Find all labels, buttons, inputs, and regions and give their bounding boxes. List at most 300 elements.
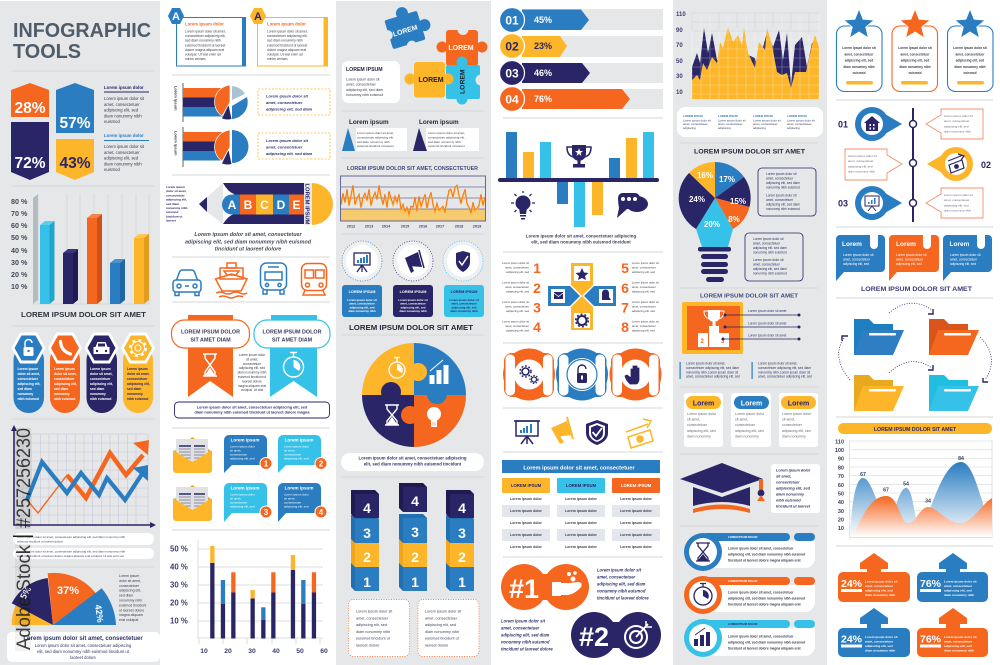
stacked bar chart: 50 [296, 648, 304, 655]
info cards under badges: diam nonummy nibh [450, 309, 478, 313]
notched bubble cards: Lorem ipsum dolor sit [843, 253, 874, 257]
A note box yellow: volutpat. Ut wisi enim ad [267, 52, 303, 56]
speech bubble 2: sit amet, [284, 448, 296, 452]
speech bubble 1: sit amet, [230, 448, 242, 452]
dotted note boxes: amet, consectetuer [356, 616, 389, 620]
text block: hexagon notes: euismod [104, 167, 120, 172]
hexagon pill cards: sed diam [127, 387, 141, 391]
smooth area chart: 10 [838, 526, 844, 532]
bar and pie combo 1 [174, 83, 248, 122]
legend card: area chart [677, 107, 823, 137]
note box: bulb lower: Lorem ipsum dolor sit [753, 237, 784, 241]
dotted note boxes: euismod tincidunt ut [425, 637, 460, 641]
light bulb pie chart [679, 162, 751, 282]
note box: bulb lower: amet, consectetuer [753, 242, 781, 246]
speech bubble 3: 3 [264, 508, 269, 517]
arrow stat card blue 76 [917, 553, 988, 602]
text block: hexagon notes: adipiscing elit, sed [104, 156, 139, 161]
text block: rank 1: nonummy nibh euismod [597, 588, 646, 594]
timeline row: hourglass: LOREM IPSUM DOLOR [728, 535, 757, 539]
text block: ribbon middle: volutpat. Ut wisi [241, 388, 263, 392]
icon: hand [552, 571, 582, 596]
text block: hexagon notes: amet, consectetuer [104, 150, 140, 155]
text block: pencil note: dolor sit amet, [166, 189, 187, 193]
hexagon pill cards: dolor sit amet, [90, 372, 113, 376]
text block: pie notes: magna aliquam [119, 613, 143, 617]
speech bubble 3 [224, 483, 272, 522]
star card 2: Lorem ipsum dolor sit [898, 46, 933, 50]
note box: bulb upper: Lorem ipsum dolor sit [766, 194, 797, 198]
callout: pie summary: laoreet dolore [70, 655, 96, 660]
text block: pie notes: dolor sit amet, [119, 579, 141, 583]
speech bubble 2: Lorem ipsum [285, 438, 313, 442]
speech bubble 2: consectetuer [284, 452, 301, 456]
text blocks with side bars: amet, consectetuer adipiscing elit, sed [686, 375, 740, 379]
text block: ribbon middle: sit amet, [246, 357, 258, 361]
callout: graduation note: consectetuer [776, 480, 800, 484]
smooth area chart: 40 [838, 500, 844, 506]
text block: pencil note: nonummy nibh [166, 206, 188, 210]
callout: ribbon summary [174, 402, 330, 418]
comparison table: Lorem ipsum dolor sit amet, consectetuer [523, 466, 635, 472]
percentage hexagon tiles: 28% [14, 100, 46, 117]
time series chart: 2014 [382, 224, 391, 228]
arrow stat card blue 76: diam nonummy nibh [944, 593, 974, 597]
3D bar chart: 80 % [11, 197, 28, 206]
smooth area chart: 60 [838, 483, 844, 489]
comparison table: LOREM IPSUM [566, 483, 597, 488]
text block: ribbon middle: laoreet dolore [242, 379, 262, 383]
info cards under badges [342, 285, 484, 317]
triangle note right: euismod tincidunt ut laoreet [428, 144, 465, 148]
timeline row: growth chart: adipiscing elit, sed diam nonummy nibh euismod [728, 640, 805, 644]
light bulb pie chart: 20% [704, 220, 720, 229]
caption: pencil: Lorem ipsum dolor sit amet, consectetuer [194, 232, 303, 238]
light bulb pie chart: 24% [689, 195, 705, 204]
three lorem cards: Lorem ipsum dolor [735, 412, 765, 416]
heading: time series: LOREM IPSUM DOLOR SIT AMET, CONSECTETUER [347, 166, 478, 172]
hexagon pill cards: consectetuer [54, 377, 75, 381]
callout: pie summary [7, 632, 160, 662]
area chart navy and yellow: 30 [676, 74, 683, 80]
numbered list with cross: Lorem ipsum dolor sit [632, 261, 659, 265]
callout: puzzle note: amet, consectetuer [346, 83, 377, 87]
three lorem cards [684, 393, 818, 447]
hexagon pill cards: nibh euismod [18, 397, 39, 401]
icon: target [625, 621, 652, 648]
trophy card with leader lines: 2 [700, 339, 704, 345]
timeline callout 1: adipiscing elit, sed [944, 124, 969, 128]
callout: pie summary: elit, sed diam nonummy nibh euismod tincidunt ut [37, 649, 130, 654]
arrow stat card blue 76: amet, consectetuer [944, 584, 973, 588]
notched bubble cards [836, 235, 992, 281]
dashed note boxes: adipiscing elit, sed diam [266, 151, 313, 156]
callout: graduation note: tincidunt ut laoreet [776, 504, 811, 508]
star card 3: adipiscing elit, sed [956, 59, 984, 63]
star card 3: euismod [963, 71, 977, 75]
text block: ribbon middle: adipiscing elit, sed [239, 366, 265, 370]
notched bubble cards: Lorem [842, 241, 862, 248]
comparison table: Lorem ipsum dolor [620, 497, 652, 501]
life ring card: hand [610, 348, 662, 400]
arrow stat card blue 24: Lorem ipsum dolor sit [865, 635, 898, 639]
timeline callout 2: amet, consectetuer [848, 159, 874, 163]
three lorem cards: adipiscing elit, sed [782, 429, 811, 433]
icon: light bulb [511, 191, 535, 220]
note pills under line chart [13, 533, 154, 559]
timeline row: stopwatch: LOREM IPSUM DOLOR [728, 579, 757, 583]
folder: blue [854, 319, 904, 355]
hexagon pill cards: Lorem ipsum [54, 367, 75, 371]
arrows between folders [839, 303, 991, 380]
stacked blocks 3: 3 [458, 525, 466, 541]
numbered list with cross: amet, consectetuer [632, 266, 656, 270]
star card 2: amet, consectetuer [900, 52, 930, 56]
text block: rank 2: Lorem ipsum dolor sit [501, 618, 546, 624]
hexagon pill cards: adipiscing elit, [127, 382, 150, 386]
time series chart [340, 176, 486, 228]
note box: bulb lower: nonummy nibh euismod [753, 250, 787, 254]
speech bubble 4: consectetuer [284, 500, 301, 504]
numbered list with cross: amet, consectetuer [505, 324, 529, 328]
star card 1: euismod [852, 71, 866, 75]
title [13, 20, 151, 63]
text blocks with side bars [680, 362, 812, 379]
rank badge #1 [501, 564, 589, 610]
callout: puzzle circle caption [341, 453, 484, 471]
smooth area chart: 70 [838, 474, 844, 480]
hexagon pill cards: consectetuer [18, 377, 39, 381]
A note box blue: Lorem ipsum dolor sit amet, [185, 30, 226, 34]
timeline step 03 [838, 186, 902, 220]
timeline row: stopwatch [684, 576, 815, 614]
speech bubble 2: adipiscing elit, sed [284, 456, 309, 460]
three lorem cards: Lorem ipsum dolor [687, 412, 717, 416]
text block: rank 2: adipiscing elit, sed diam [501, 632, 550, 638]
area chart navy and yellow [676, 12, 819, 99]
callout: pie summary: Lorem ipsum dolor sit amet, consectetuer [23, 636, 143, 642]
stacked blocks 2: 1 [411, 574, 419, 590]
text block: pencil note: sed diam [166, 202, 179, 206]
stacked blocks 3: 1 [458, 574, 466, 590]
timeline callout 1: diam nonummy nibh [944, 130, 971, 134]
triangle note right: consectetuer adipiscing elit, [428, 135, 465, 139]
hexagon pill cards: consectetuer [90, 377, 111, 381]
pencil with letters: D [277, 198, 286, 212]
timeline step 03: 03 [838, 198, 848, 208]
text block: hexagon notes: Lorem ipsum dolor sit [104, 144, 145, 149]
A note box blue: minim veniam, [185, 57, 206, 61]
comparison table [502, 460, 660, 549]
hexagon pill cards: sed diam [54, 387, 68, 391]
speech bubble 4: Lorem ipsum dolor [284, 492, 309, 496]
info cards under badges: LOREM IPSUM [400, 290, 426, 294]
numbered list with cross: Lorem ipsum dolor sit [502, 300, 529, 304]
three lorem cards: Lorem [788, 400, 809, 408]
icon: shield check [586, 420, 608, 445]
star card 3: diam nonummy nibh [954, 65, 986, 69]
text blocks with side bars: consectetuer adipiscing elit, sed diam [686, 366, 739, 370]
icon: hourglass [203, 354, 217, 376]
text block: pencil note: laoreet [166, 219, 176, 223]
text blocks with side bars: nonummy nibh.Lorem ipsum dolor sit [758, 370, 810, 374]
timeline callout 3: Lorem ipsum dolor sit [944, 193, 973, 197]
icon: gear [121, 332, 155, 364]
smooth area chart: 90 [838, 457, 844, 463]
caption: diverging bars: elit, sed diam nonummy nibh euismod tincidunt [531, 240, 631, 244]
3D bar chart: 70 % [11, 209, 28, 218]
percentage hexagon tiles: 72% [14, 155, 46, 172]
star card 2: euismod [908, 71, 922, 75]
speech bubble 1: Lorem ipsum [231, 438, 259, 442]
timeline row: stopwatch: tincidunt ut laoreet dolore magna aliquam erat [728, 602, 801, 606]
note pills under line chart: euismod tincidunt ut laoreet dolore magna aliquam erat volutpat. Ut wisi enim ad [17, 554, 124, 558]
text block: rank 1: adipiscing elit, sed diam [597, 582, 646, 586]
puzzle pieces: LOREM [448, 45, 474, 52]
text block: hexagon notes: adipiscing elit, sed [104, 108, 139, 113]
text block: ribbon middle: Lorem ipsum dolor [239, 353, 266, 357]
percentage hexagon tiles: 57% [59, 115, 91, 132]
text block: hexagon notes: diam nonummy nibh [104, 161, 142, 166]
timeline step 02: 02 [981, 160, 991, 170]
dashed note boxes: adipiscing elit, sed diam [266, 106, 313, 111]
text blocks with side bars: Lorem ipsum dolor sit amet, [758, 362, 797, 366]
callout: graduation note: nibh euismod [776, 498, 801, 502]
speech bubble 1: adipiscing elit, sed [230, 456, 255, 460]
triangle note right: Lorem ipsum dolor sit amet, [428, 131, 465, 135]
text block: pie notes: nonummy nibh [119, 598, 142, 602]
three lorem cards: Lorem ipsum dolor [782, 412, 812, 416]
text block: pie notes: sed diam [119, 594, 133, 598]
numbered list with cross: amet, consectetuer [632, 305, 656, 309]
timeline row: hourglass: Lorem ipsum dolor sit amet, consectetuer [728, 546, 794, 550]
three lorem cards: sit amet, [735, 418, 748, 422]
dashed note boxes: amet, consectetuer [266, 100, 303, 105]
callout: pie summary: Lorem ipsum dolor sit amet, consectetuer adipiscing [35, 643, 132, 648]
pencil with letters: LOREM IPSUM [304, 184, 310, 225]
speech bubble 3: Lorem ipsum [231, 486, 259, 490]
numbered list with cross: Lorem ipsum dolor sit [502, 280, 529, 284]
text block: pencil note: euismod [166, 210, 179, 214]
icon: money with arrow [626, 419, 653, 448]
banner: area chart: LOREM IPSUM DOLOR SIT AMET [874, 427, 957, 433]
text block: ribbon middle: euismod tincidunt ut [238, 375, 266, 379]
arrow stat card orange 24: adipiscing elit, sed [865, 588, 893, 592]
arrow stat card blue 76: Lorem ipsum dolor sit [944, 580, 976, 584]
timeline step 01 [838, 107, 902, 141]
stacked bar chart [170, 540, 328, 655]
text block: hexagon notes: Lorem ipsum dolor sit [104, 96, 145, 101]
title: INFOGRAPHIC [13, 20, 151, 42]
info cards under badges: LOREM IPSUM [349, 290, 375, 294]
icon: presentation board [514, 421, 540, 444]
triangle note left [342, 119, 407, 151]
trophy card with leader lines: 3 [721, 339, 725, 345]
stacked blocks 1: 2 [363, 549, 371, 565]
dotted note boxes: euismod tincidunt ut [356, 637, 391, 641]
dotted note boxes: laoreet dolore [356, 644, 379, 648]
triangle note right [413, 119, 479, 151]
numbered list with cross: adipiscing elit, sed [506, 270, 529, 274]
bar and pie combo 1: Lorem ipsum [174, 86, 178, 111]
hexagon pill cards: nonummy [18, 392, 33, 396]
3D bar chart: 50 % [11, 233, 28, 242]
time series chart: 2019 [473, 224, 481, 228]
text block: pie notes: euismod tincidunt [119, 603, 146, 607]
smooth area chart: 54 [903, 482, 909, 488]
comparison table: Lorem ipsum dolor [565, 521, 597, 525]
text block: pie notes: consectetuer [119, 584, 140, 588]
time series chart: 2015 [401, 224, 409, 228]
text blocks with side bars: Lorem ipsum dolor sit amet, [686, 362, 725, 366]
legend card: area chart: adipiscing [787, 126, 800, 130]
stacked blocks 1: 3 [363, 525, 371, 541]
star card 3 [948, 9, 993, 92]
area chart navy and yellow: 110 [676, 12, 686, 18]
timeline callout 3: amet, consectetuer [944, 198, 970, 202]
hexagon pill cards: adipiscing elit, [90, 382, 113, 386]
comparison table: Lorem ipsum dolor [620, 545, 652, 549]
numbered list with cross: adipiscing elit, sed [632, 290, 655, 294]
progress arrows: 76% [534, 94, 552, 104]
numbered list with cross: amet, consectetuer [505, 285, 529, 289]
text block: hexagon notes: amet, consectetuer [104, 102, 140, 107]
info cards under badges: LOREM IPSUM [451, 290, 477, 294]
A note box blue: A [172, 11, 180, 23]
text block: hexagon notes: euismod [104, 119, 120, 124]
timeline callout 1: Lorem ipsum dolor sit [944, 114, 973, 118]
icon: growth chart [430, 360, 448, 384]
icon: bus outline [260, 263, 286, 294]
progress arrows: 46% [534, 68, 552, 78]
note pills under line chart: euismod tincidunt ut laoreet dolore [17, 540, 63, 544]
stacked bar chart: 40 % [170, 562, 188, 572]
text blocks with side bars: amet, consectetuer adipiscing elit, sed [758, 375, 812, 379]
numbered list with cross: adipiscing elit, sed [632, 270, 655, 274]
icon: speech bubbles [617, 193, 648, 218]
arrow stat card blue 24: amet, consectetuer [865, 640, 894, 644]
notched bubble cards: Lorem ipsum dolor sit [950, 253, 981, 257]
timeline step 01: 01 [838, 120, 848, 130]
numbered list with cross: 2 [533, 280, 541, 296]
notched bubble cards: amet, consectetuer [896, 258, 924, 262]
rank badge #2 [571, 612, 661, 658]
hexagon pill cards: sed diam [18, 387, 32, 391]
info cards under badges: diam nonummy nibh [348, 309, 376, 313]
dotted note boxes: laoreet dolore [425, 644, 448, 648]
info cards under badges: amet, consectetuer [349, 302, 376, 306]
text block: pencil note: tincidunt ut [166, 214, 182, 218]
arrow stat card orange 76: adipiscing elit, sed [944, 644, 972, 648]
smooth area chart: 30 [838, 509, 844, 515]
A note box yellow [250, 8, 328, 66]
stacked bar chart: 20 % [170, 598, 188, 608]
notched bubble cards: adipiscing elit, sed [950, 262, 976, 266]
note pills under line chart: Lorem ipsum dolor sit amet, consectetuer adipiscing elit, sed diam nonummy nibh [17, 550, 126, 554]
info cards under badges: adipiscing elit, sed [349, 305, 375, 309]
life ring card: lock [556, 348, 608, 400]
note box: bulb lower [745, 233, 803, 281]
arrow stat card blue 76: adipiscing elit, sed [944, 588, 972, 592]
speech bubble 3: adipiscing elit, sed [230, 504, 255, 508]
hexagon pill cards: Lorem ipsum [90, 367, 111, 371]
numbered list with cross: 5 [621, 260, 629, 276]
stacked bar chart: 20 [224, 648, 232, 655]
text block: ribbon middle: magna aliquam erat [238, 384, 266, 388]
star card 3: Lorem ipsum dolor sit [953, 46, 988, 50]
triangle note left: Lorem ipsum [349, 119, 389, 126]
speech bubble 2: 2 [319, 460, 324, 468]
circle badge: presentation [342, 241, 382, 281]
heading: bubble cards: LOREM IPSUM DOLOR SIT AMET [861, 286, 972, 293]
note box: bulb upper: nonummy nibh euismod [766, 186, 800, 190]
A note box yellow: A [254, 11, 262, 23]
icon: car outline [173, 270, 201, 296]
pie chart fan: 42% [93, 604, 105, 623]
area chart navy and yellow: 10 [676, 90, 683, 96]
arrow stat card orange 76: amet, consectetuer [944, 640, 973, 644]
stacked blocks 3: 4 [458, 500, 466, 516]
text block: hexagon notes: Lorem ipsum dolor [104, 133, 144, 138]
info cards under badges: amet, consectetuer [451, 302, 478, 306]
hexagon pill cards: nonummy [127, 392, 143, 396]
stacked bar chart: 30 % [170, 580, 188, 590]
arrow stat card orange 76: 76% [920, 634, 941, 646]
puzzle circle [362, 343, 466, 447]
dotted note boxes: diam nonummy nibh [425, 630, 459, 634]
dotted note boxes: Lorem ipsum dolor sit [356, 610, 393, 614]
rank badge #1: #1 [509, 574, 539, 604]
arrow stat card orange 24: 24% [841, 579, 862, 590]
heading: trophy section: LOREM IPSUM DOLOR SIT AMET [700, 294, 799, 300]
A note box blue: volutpat. Ut wisi enim ad [185, 52, 221, 56]
A note box yellow: Lorem ipsum dolor sit amet, [267, 30, 308, 34]
3D bar chart [11, 194, 150, 304]
circle badge: megaphone [393, 241, 433, 281]
three lorem cards: consectetuer [735, 423, 756, 427]
A note box blue: euismod tincidunt ut laoreet [185, 43, 225, 47]
arrow stat card orange 76: Lorem ipsum dolor sit [944, 635, 976, 639]
text block: ribbon middle: consectetuer [243, 362, 262, 366]
three lorem cards: diam nonummy [687, 434, 711, 438]
watermark: stock id: Adobe Stock [14, 545, 35, 650]
timeline row: growth chart: tincidunt ut laoreet dolore magna aliquam erat [728, 646, 801, 650]
caption: pencil: tincidunt ut laoreet dolore [215, 247, 281, 253]
speech bubble 4: Lorem ipsum [285, 486, 313, 490]
info cards under badges: diam nonummy nibh [399, 309, 427, 313]
timeline row: growth chart: Lorem ipsum dolor sit amet, consectetuer [728, 634, 794, 638]
numbered list with cross: amet, consectetuer [632, 285, 656, 289]
speech bubble 1: Lorem ipsum dolor [230, 444, 255, 448]
note box: bulb upper: amet, consectetuer [766, 176, 794, 180]
three lorem cards: Lorem [693, 400, 714, 408]
ribbon card: stopwatch [254, 315, 330, 397]
time series chart: 2012 [347, 224, 355, 228]
hexagon pill cards: nibh euismod [127, 397, 148, 401]
icon: envelope 1 [173, 437, 212, 473]
dashed note boxes [258, 89, 330, 159]
comparison table: LOREM IPSUM [621, 483, 652, 488]
comparison table: Lorem ipsum dolor [565, 497, 597, 501]
A note box blue: consectetuer adipiscing elit, [185, 34, 226, 38]
line chart with arrows [11, 425, 156, 528]
stacked blocks 3 [446, 490, 474, 591]
percentage hexagon tiles: 43% [59, 155, 91, 172]
A note box blue: sed diam nonummy nibh [185, 39, 221, 43]
hexagon pill cards: adipiscing elit, [54, 382, 77, 386]
text block: rank 1: tincidunt ut laoreet dolore [597, 596, 649, 600]
comparison table: Lorem ipsum dolor [510, 497, 542, 501]
